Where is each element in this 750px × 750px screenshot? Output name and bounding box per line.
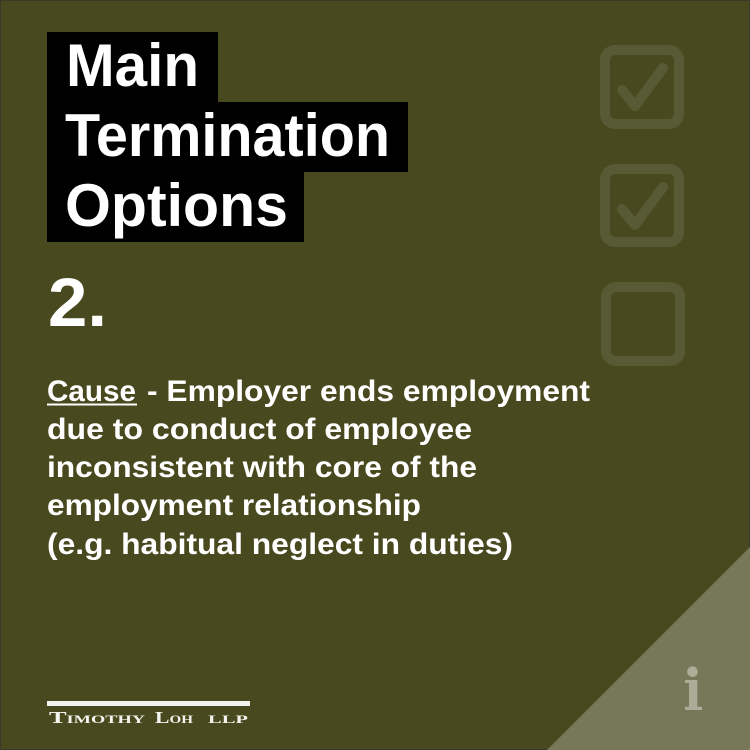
- body word: Cause: Cause: [47, 375, 136, 408]
- body line 4: employment relationship: [47, 489, 421, 522]
- icon: empty box 3: [606, 287, 680, 361]
- body line 5: (e.g. habitual neglect in duties): [47, 528, 513, 561]
- body line 3: inconsistent with core of the: [47, 451, 477, 484]
- logo: [47, 701, 250, 727]
- icon: checked box 1: [605, 50, 679, 124]
- body line 2: due to conduct of employee: [47, 413, 472, 446]
- logo word: Loh: L OH: [155, 708, 193, 727]
- corner triangle: [547, 547, 750, 750]
- logo word: LLP: LLP: [208, 714, 248, 726]
- body line 1 remainder: - Employer ends employment: [147, 375, 590, 408]
- title block: [47, 32, 408, 242]
- title black highlight: [47, 32, 408, 242]
- icon: info i: [685, 666, 702, 710]
- underline under Cause: [47, 404, 137, 406]
- title line: Options: Options: [65, 172, 288, 239]
- title line: Main: Main: [66, 32, 199, 99]
- logo word: Timothy: T IMOTHY: [49, 708, 146, 727]
- title line: Termination: Termination: [65, 102, 390, 169]
- body text: [47, 375, 590, 561]
- icon: checked box 2: [605, 169, 679, 242]
- number 2: 2.: [48, 264, 107, 341]
- logo bar: [47, 701, 250, 706]
